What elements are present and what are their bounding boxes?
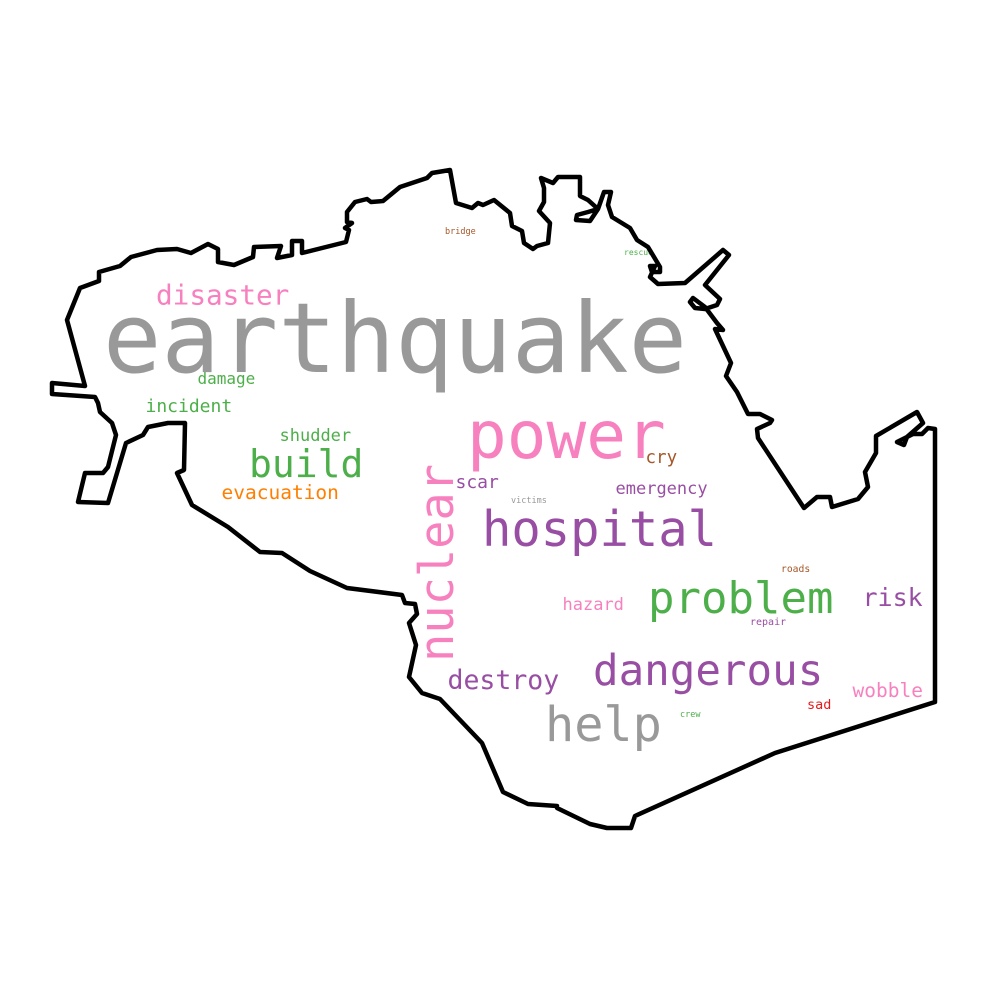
word: risk: risk — [862, 583, 923, 612]
word: cry: cry — [646, 448, 677, 468]
word: earthquake: earthquake — [103, 282, 687, 395]
word: repair: repair — [750, 617, 786, 628]
word: dangerous: dangerous — [593, 647, 823, 696]
word: sad: sad — [807, 697, 831, 713]
word: destroy: destroy — [448, 665, 559, 696]
word: rescue: rescue — [624, 248, 653, 257]
word: disaster: disaster — [156, 278, 289, 312]
word: crew: crew — [680, 710, 701, 720]
word: roads: roads — [781, 564, 810, 575]
word: emergency: emergency — [616, 479, 708, 499]
word: nuclear (vertical): nuclear — [410, 464, 465, 662]
word: scar: scar — [456, 472, 499, 493]
word: shudder: shudder — [280, 426, 351, 446]
word: build: build — [249, 442, 363, 486]
word: bridge: bridge — [445, 227, 476, 237]
word: problem: problem — [648, 573, 833, 624]
word: evacuation: evacuation — [222, 481, 339, 504]
word: incident: incident — [146, 396, 232, 417]
word: hospital: hospital — [482, 501, 717, 558]
word: damage: damage — [198, 369, 255, 388]
word: victims: victims — [511, 496, 547, 506]
word: power: power — [467, 397, 666, 474]
word cloud: earthquake terms — [103, 227, 923, 753]
word: hazard: hazard — [562, 595, 624, 615]
map outline — [52, 170, 935, 828]
word: wobble: wobble — [852, 679, 923, 702]
word: help: help — [545, 697, 662, 753]
